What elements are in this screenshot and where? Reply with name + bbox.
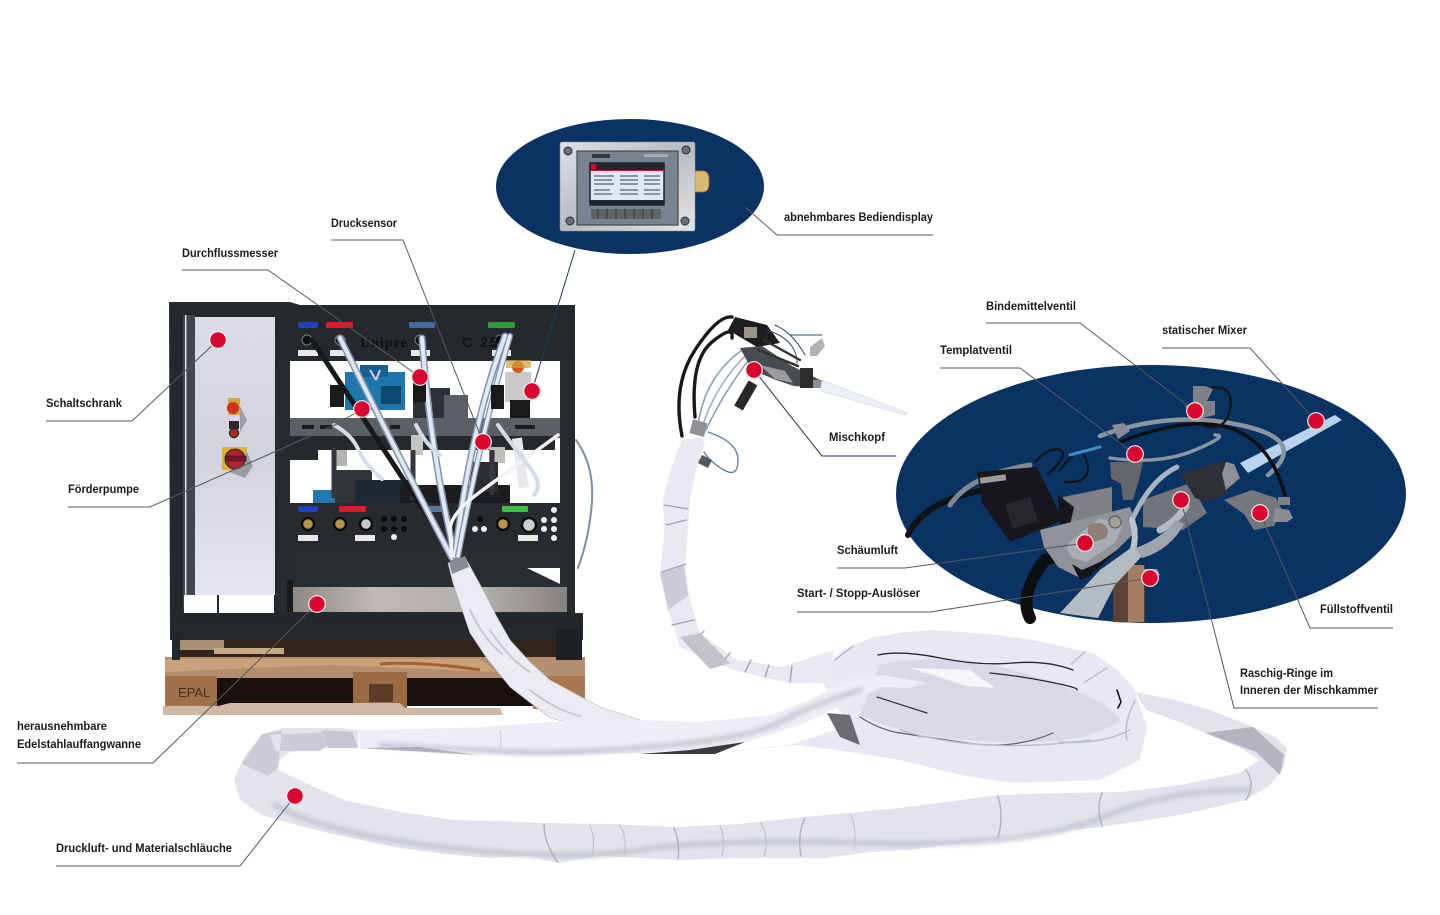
lower pump and fittings	[288, 435, 529, 503]
leader: Drucksensor	[331, 240, 483, 442]
hose from machine to floor	[448, 556, 640, 728]
stand post	[1113, 565, 1145, 622]
cable loop	[704, 432, 738, 472]
main switch	[222, 447, 253, 478]
frame	[169, 302, 583, 640]
label: Drucksensor: Drucksensor	[331, 218, 397, 230]
upper control strip	[277, 320, 575, 359]
head body	[728, 317, 825, 388]
hose arm to mixing head	[660, 437, 833, 683]
leader: Mischkopf	[754, 370, 896, 456]
label: statischer Mixer: statischer Mixer	[1162, 325, 1248, 337]
operator display	[560, 142, 695, 231]
label: Bindemittelventil: Bindemittelventil	[986, 301, 1076, 313]
leader: statischer Mixer	[1162, 348, 1316, 421]
side cable	[576, 440, 592, 568]
upper control strip: Unipre	[360, 336, 408, 351]
label: Durchflussmesser: Durchflussmesser	[182, 248, 278, 260]
static mixer nozzle	[820, 380, 908, 415]
collar	[689, 419, 708, 437]
leader: Druckluft- und Materialschläuche	[56, 796, 295, 866]
label: Füllstoffventil: Füllstoffventil	[1320, 604, 1393, 616]
black pneumatic hoses	[679, 317, 750, 436]
valve block	[977, 467, 1112, 542]
leader: Durchflussmesser	[182, 270, 420, 377]
label: herausnehmbare Edelstahlauffangwanne: herausnehmbare	[17, 721, 107, 733]
template valve	[1110, 462, 1143, 500]
trigger handle	[734, 380, 757, 410]
leader: Schaltschrank	[46, 340, 218, 421]
nozzle	[1240, 415, 1342, 473]
lower control strip	[277, 503, 575, 547]
label: Förderpumpe: Förderpumpe	[68, 484, 139, 496]
air fitting	[1040, 507, 1138, 580]
mounting rail	[290, 418, 560, 450]
icon: connector plug	[694, 171, 709, 192]
leader: display to machine	[532, 250, 575, 391]
pallet block left: EPAL	[178, 685, 210, 700]
frame uprights	[277, 358, 290, 616]
label: Schaltschrank: Schaltschrank	[46, 398, 123, 410]
switch cabinet	[195, 317, 275, 595]
drip tray	[170, 580, 583, 629]
panel: machine on pallet	[163, 302, 592, 715]
braided hoses	[1060, 467, 1184, 618]
mixing chamber	[1143, 460, 1293, 530]
leader: Füllstoffventil	[1260, 513, 1393, 628]
panel: mixing head detail oval	[896, 365, 1406, 623]
blue pump motor	[345, 365, 405, 410]
label: Druckluft- und Materialschläuche: Druckluft- und Materialschläuche	[56, 843, 232, 855]
label: Templatventil: Templatventil	[940, 345, 1012, 357]
coil of hose	[723, 630, 1147, 783]
panel: hose assembly	[234, 437, 1287, 863]
leader: Raschig-Ringe	[1181, 500, 1378, 708]
label: Schäumluft: Schäumluft	[837, 545, 898, 557]
label: abnehmbares Bediendisplay: abnehmbares Bediendisplay	[784, 212, 934, 224]
hose lower loop	[234, 692, 1287, 863]
black hoses	[908, 387, 1285, 618]
leader: Schäumluft	[837, 543, 1085, 568]
label: Start- / Stopp-Auslöser: Start- / Stopp-Auslöser	[797, 588, 921, 600]
label: Raschig-Ringe im Inneren der Mischkammer	[1240, 668, 1379, 697]
leader: Förderpumpe	[68, 409, 362, 507]
label: Raschig-Ringe im Inneren der Mischkammer: Inneren der Mischkammer	[1240, 685, 1379, 697]
binder valve	[1185, 386, 1215, 420]
label: herausnehmbare Edelstahlauffangwanne	[17, 721, 141, 751]
material tubes	[312, 336, 558, 558]
pallet block left	[165, 676, 217, 709]
leader: Edelstahlauffangwanne	[17, 604, 317, 763]
hose band across centre	[358, 675, 927, 755]
emergency stop	[227, 398, 247, 438]
label: Mischkopf: Mischkopf	[829, 432, 885, 444]
panel: mixing head on stand	[679, 317, 908, 472]
leader: abnehmbares Bediendisplay	[745, 207, 933, 235]
marker dots	[210, 332, 1324, 804]
trigger clamp	[1143, 569, 1160, 578]
leader: Bindemittelventil	[986, 323, 1195, 411]
leader: Templatventil	[940, 368, 1135, 454]
upper control strip: C 25	[462, 334, 500, 350]
label: herausnehmbare Edelstahlauffangwanne: Edelstahlauffangwanne	[17, 739, 141, 751]
panel: detachable display oval	[496, 119, 764, 254]
leader: Start-/Stopp-Auslöser	[797, 578, 1150, 612]
label: Raschig-Ringe im Inneren der Mischkammer: Raschig-Ringe im	[1240, 668, 1333, 680]
pallet	[163, 628, 585, 715]
open frame interior	[290, 361, 560, 503]
